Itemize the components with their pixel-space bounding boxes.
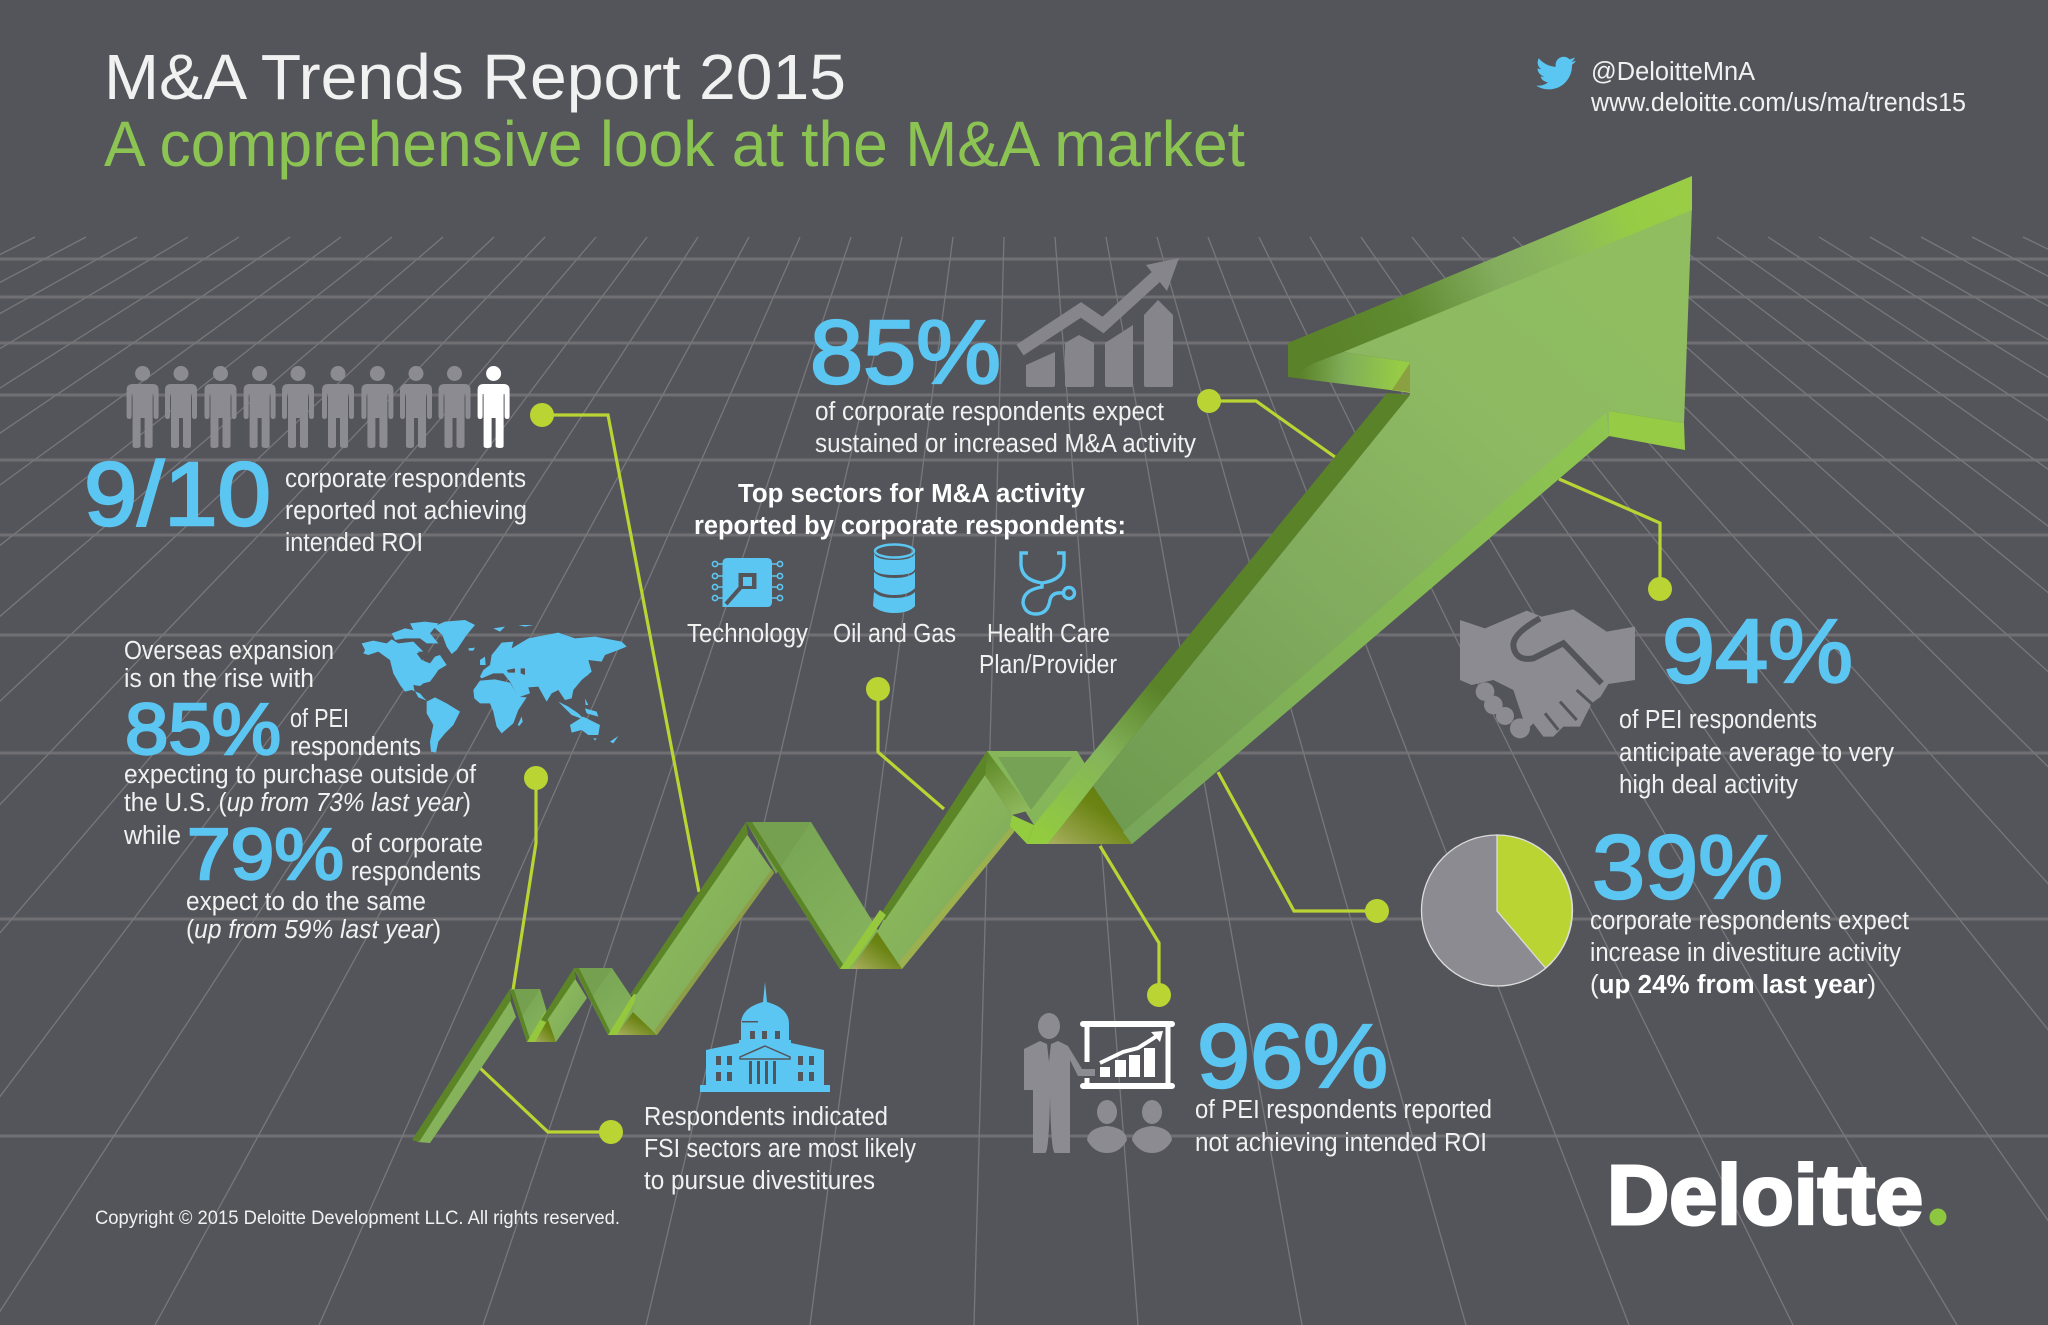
stat: 9/10: 9/10: [84, 445, 271, 545]
text: 39% description: increase in divestiture activity: [1590, 939, 1901, 967]
fold: first peak: [510, 989, 556, 1042]
arrow shaft and head: [1027, 176, 1692, 844]
text: overseas expansion: is on the rise with: [124, 665, 314, 693]
stat: 39%: 39%: [1592, 818, 1783, 918]
icon: handshake: [1460, 609, 1635, 738]
presenter figure: [1024, 1013, 1095, 1153]
sector labels: Technology: [687, 620, 808, 648]
text: overseas expansion: respondents: [351, 858, 481, 886]
text: 96% description: of PEI respondents reported: [1195, 1096, 1492, 1124]
text: 85% description: of corporate respondents expect: [815, 398, 1164, 426]
segment: rise one: [412, 989, 516, 1143]
icon: twitter bird: [1536, 57, 1576, 89]
stat: 96%: 96%: [1197, 1007, 1388, 1107]
text: 9/10 description: [285, 465, 527, 557]
zigzag growth arrow: [412, 176, 1692, 1143]
text: overseas expansion: the U.S. (up from 73% last year): [124, 789, 471, 817]
Deloitte logo: Deloitte: [1607, 1148, 1923, 1242]
text: FSI sectors: to pursue divestitures: [644, 1167, 875, 1195]
text: overseas expansion: of corporate: [351, 830, 483, 858]
subtitle: A comprehensive look at the M&A market: [104, 108, 1245, 180]
stat: 94%: 94%: [1662, 602, 1853, 702]
presentation board: [1083, 1024, 1172, 1086]
text: overseas expansion: Overseas expansion: [124, 637, 334, 665]
people pictogram 9 of 10: [127, 366, 510, 448]
icon: oil barrel: [873, 544, 915, 613]
text: 94% description: anticipate average to very: [1619, 739, 1894, 767]
segment: rise three: [630, 822, 902, 1035]
copyright: Copyright © 2015 Deloitte Development LLC. All rights reserved.: [95, 1207, 620, 1229]
audience: [1087, 1100, 1172, 1153]
text: 94% description: [1619, 706, 1894, 799]
text: 85% description: [815, 398, 1196, 458]
text: 96% description: [1195, 1096, 1492, 1157]
icon: world map: [362, 620, 627, 753]
board chart: [1100, 1031, 1163, 1077]
text: overseas expansion: while: [123, 822, 181, 850]
text: 9/10 description: reported not achieving: [285, 497, 527, 525]
sector labels: Oil and Gas: [833, 620, 956, 648]
icon: technology chip: [712, 558, 783, 607]
social links: www.deloitte.com/us/ma/trends15: [1590, 89, 1966, 117]
icon: stethoscope: [1021, 553, 1074, 614]
text: 9/10 description: corporate respondents: [285, 465, 526, 493]
text: overseas expansion: expecting to purchase outside of: [124, 761, 477, 789]
text: 85% description: sustained or increased M&A activity: [815, 430, 1196, 458]
text: 39% description: corporate respondents expect: [1590, 907, 1909, 935]
sector labels: [687, 620, 1117, 679]
icon: presenter with chart: [1024, 1013, 1172, 1153]
social links: [1590, 58, 1966, 117]
sector labels: Health Care: [987, 620, 1110, 648]
text: overseas expansion: expect to do the same: [186, 888, 426, 916]
text: FSI sectors: FSI sectors are most likely: [644, 1135, 916, 1163]
text: overseas expansion: [123, 637, 483, 944]
text: overseas expansion: (up from 59% last year): [186, 916, 441, 944]
heading: top sectors: reported by corporate respondents:: [694, 512, 1126, 540]
text: 94% description: of PEI respondents: [1619, 706, 1817, 734]
icon: capitol building: [700, 982, 830, 1092]
text: 39% description: [1590, 907, 1909, 999]
text: 96% description: not achieving intended ROI: [1195, 1129, 1487, 1157]
sector labels: Plan/Provider: [979, 651, 1117, 679]
title: M&A Trends Report 2015: [104, 41, 846, 113]
text: 39% description: (up 24% from last year): [1590, 971, 1876, 999]
pie chart: 39%: [1422, 835, 1572, 986]
text: overseas expansion: 79%: [187, 815, 344, 895]
text: overseas expansion: 85%: [125, 690, 281, 770]
heading: top sectors: Top sectors for M&A activity: [738, 480, 1086, 508]
icon: rising bar chart: [1020, 258, 1179, 387]
social links: @DeloitteMnA: [1591, 58, 1755, 86]
segment: rise four: [840, 751, 1092, 969]
segment: rise two: [541, 968, 657, 1042]
text: FSI sectors: Respondents indicated: [644, 1103, 888, 1131]
text: overseas expansion: of PEI: [290, 705, 349, 733]
text: overseas expansion: respondents: [290, 733, 421, 761]
text: 94% description: high deal activity: [1619, 771, 1798, 799]
heading: top sectors: [694, 480, 1126, 540]
connector lines: [480, 389, 1672, 1144]
text: FSI sectors: [644, 1103, 916, 1195]
stat: 85% corporate: 85%: [810, 303, 1001, 403]
text: 9/10 description: intended ROI: [285, 529, 423, 557]
